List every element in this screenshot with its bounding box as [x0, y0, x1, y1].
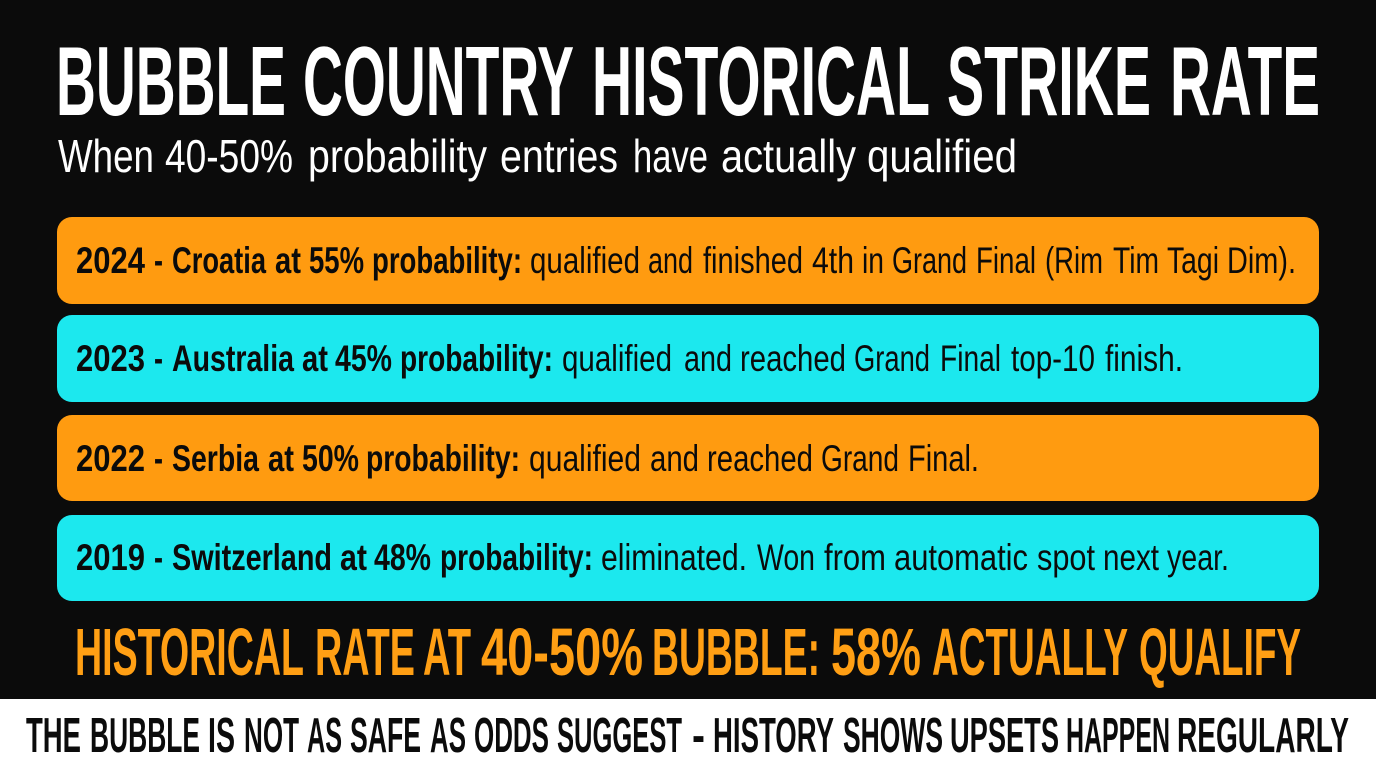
- footer banner: -: [692, 709, 705, 763]
- panel: 2023 Australia: 45%: [335, 338, 392, 379]
- panel: 2024 Croatia: in: [862, 240, 884, 281]
- panel: 2024 Croatia: Final: [976, 240, 1036, 281]
- panel: 2019 Switzerland: year.: [1167, 537, 1229, 578]
- panel: 2022 Serbia: qualified: [529, 438, 641, 479]
- panel: 2024 Croatia: Dim).: [1227, 240, 1296, 281]
- panel: 2023 Australia: Australia: [172, 338, 294, 379]
- panel: 2024 Croatia: 55%: [309, 240, 364, 281]
- panel: 2019 Switzerland: 2019: [76, 537, 145, 578]
- panel: 2023 Australia: top-10: [1011, 338, 1095, 379]
- footer banner: HAPPEN: [1066, 709, 1170, 763]
- panel: 2022 Serbia: Serbia: [172, 438, 259, 479]
- footer banner: SHOWS: [843, 709, 943, 763]
- panel: 2023 Australia: finish.: [1105, 338, 1183, 379]
- panel: 2024 Croatia: qualified: [530, 240, 640, 281]
- panel: 2019 Switzerland: Switzerland: [172, 537, 332, 578]
- panel: 2024 Croatia: (Rim: [1045, 240, 1103, 281]
- subtitle: When: [58, 130, 154, 182]
- panel: 2024 Croatia: finished: [703, 240, 803, 281]
- footer banner: IS: [208, 709, 235, 763]
- panel: 2024 Croatia: Croatia: [172, 240, 266, 281]
- panel: 2024 Croatia: Tagi: [1167, 240, 1219, 281]
- footer banner: ODDS: [474, 709, 549, 763]
- panel: 2022 Serbia: [57, 415, 1319, 501]
- panel: 2019 Switzerland: spot: [1037, 537, 1096, 578]
- panel: 2019 Switzerland: eliminated.: [601, 537, 747, 578]
- panel: 2023 Australia: probability:: [400, 338, 553, 379]
- panel: 2024 Croatia: Tim: [1113, 240, 1159, 281]
- panel: 2022 Serbia: and: [650, 438, 699, 479]
- footer banner: SUGGEST: [557, 709, 682, 763]
- footer banner: AS: [307, 709, 342, 763]
- title: STRIKE: [947, 26, 1151, 136]
- subtitle: 40-50%: [165, 130, 293, 182]
- key statistic headline: 40-50%: [481, 615, 643, 690]
- panel: 2022 Serbia: 50%: [302, 438, 359, 479]
- footer banner: HISTORY: [713, 709, 834, 763]
- title: HISTORICAL: [592, 26, 930, 136]
- footer banner: NOT: [244, 709, 299, 763]
- panel: 2024 Croatia: [57, 217, 1319, 304]
- key statistic headline: 58%: [831, 615, 921, 690]
- panel: 2024 Croatia: -: [154, 240, 163, 281]
- key statistic headline: RATE: [315, 615, 415, 690]
- panel: 2024 Croatia: 4th: [812, 240, 854, 281]
- panel: 2019 Switzerland: probability:: [440, 537, 593, 578]
- panel: 2022 Serbia: Final.: [908, 438, 979, 479]
- panel: 2022 Serbia: probability:: [366, 438, 520, 479]
- panel: 2022 Serbia: -: [154, 438, 163, 479]
- panel: 2019 Switzerland: [57, 515, 1319, 601]
- footer banner: AS: [430, 709, 466, 763]
- panel: 2019 Switzerland: 48%: [374, 537, 431, 578]
- title: COUNTRY: [303, 26, 574, 136]
- key statistic headline: AT: [423, 615, 471, 690]
- footer banner: SAFE: [350, 709, 421, 763]
- panel: 2019 Switzerland: from: [824, 537, 886, 578]
- panel: 2019 Switzerland: Won: [757, 537, 815, 578]
- panel: 2023 Australia: qualified: [562, 338, 672, 379]
- panel: 2024 Croatia: and: [648, 240, 693, 281]
- panel: 2019 Switzerland: at: [340, 537, 367, 578]
- panel: 2019 Switzerland: automatic: [894, 537, 1028, 578]
- panel: 2023 Australia: 2023: [76, 338, 145, 379]
- title: [56, 26, 1320, 136]
- panel: 2023 Australia: and: [684, 338, 732, 379]
- subtitle: [58, 130, 1017, 182]
- key statistic headline: HISTORICAL: [75, 615, 304, 690]
- key statistic headline: [75, 615, 1301, 690]
- panel: 2023 Australia: Final: [940, 338, 1001, 379]
- panel: 2023 Australia: reached: [740, 338, 846, 379]
- panel: 2024 Croatia: at: [275, 240, 301, 281]
- panel: 2024 Croatia: Grand: [892, 240, 967, 281]
- footer banner: [0, 699, 1376, 768]
- panel: 2022 Serbia: Grand: [821, 438, 899, 479]
- title: BUBBLE: [56, 26, 286, 136]
- panel: 2019 Switzerland: -: [154, 537, 163, 578]
- panel: 2024 Croatia: probability:: [372, 240, 522, 281]
- key statistic headline: ACTUALLY: [932, 615, 1128, 690]
- panel: 2024 Croatia: 2024: [76, 240, 145, 281]
- subtitle: qualified: [867, 130, 1017, 182]
- panel: 2022 Serbia: at: [268, 438, 294, 479]
- panel: 2023 Australia: Grand: [854, 338, 930, 379]
- footer banner: BUBBLE: [90, 709, 200, 763]
- panel: 2022 Serbia: 2022: [76, 438, 145, 479]
- key statistic headline: BUBBLE:: [652, 615, 820, 690]
- footer banner: UPSETS: [950, 709, 1059, 763]
- panel: 2023 Australia: [57, 315, 1319, 402]
- subtitle: have: [633, 130, 708, 182]
- subtitle: probability: [308, 130, 487, 182]
- footer banner: THE: [26, 709, 81, 763]
- panel: 2023 Australia: at: [302, 338, 328, 379]
- panel: 2019 Switzerland: next: [1103, 537, 1160, 578]
- subtitle: actually: [721, 130, 856, 182]
- panel: 2022 Serbia: reached: [707, 438, 813, 479]
- subtitle: entries: [500, 130, 618, 182]
- panel: 2023 Australia: -: [154, 338, 163, 379]
